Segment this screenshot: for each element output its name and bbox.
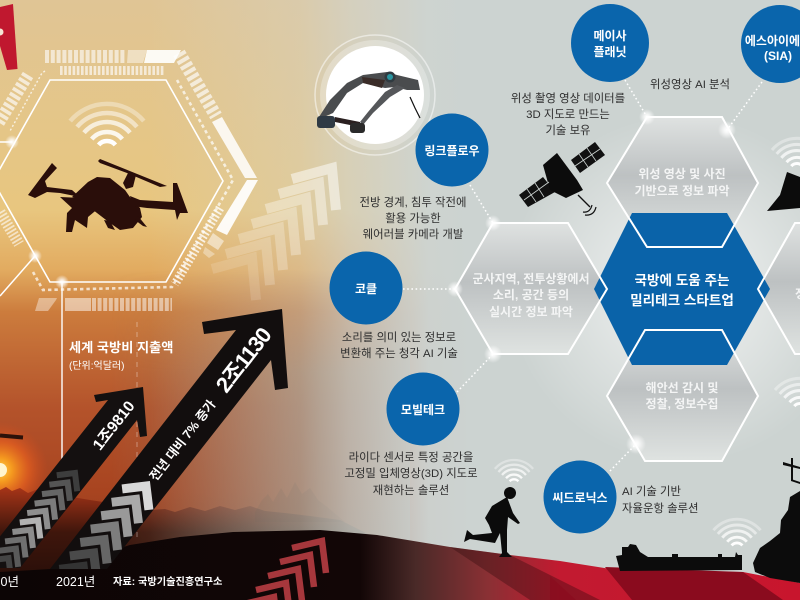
description: Seadronix: AI 기술 기반 [622,485,682,498]
description: SIA: 위성영상 AI 분석 [650,78,730,91]
icon: satellite [519,142,605,215]
helicopter silhouette fragment [0,436,23,438]
hexagon label: coast [646,381,718,411]
icon: wifi right [775,378,800,406]
icon: wifi above drone [70,104,144,145]
company: Meissa Planet: 플래닛 [593,44,627,59]
connector dots [403,80,762,471]
panel: hexagon cluster [455,117,800,461]
hexagon label: center: 밀리테크 스타트업 [630,293,734,308]
description: Meissa Planet: 기술 보유 [545,124,591,137]
small arrow: 2020 spending [0,387,147,576]
description: Mobiltech: 재현하는 솔루션 [373,483,449,497]
hexagon label: center [630,273,734,308]
description: Seadronix [622,485,699,515]
connector glow nodes [447,109,736,454]
icon: tanker ship [616,544,742,571]
big arrow: 2021 spending [50,309,288,590]
description: Meissa Planet: 위성 촬영 영상 데이터를 [511,92,625,105]
ground [0,530,800,600]
hexagon label: satellite: 위성 영상 및 사진 [638,167,726,181]
value: 2020: 1조9810 [90,398,139,454]
axis labels and source: 자료: 국방기술진흥연구소 [113,575,222,588]
center hexagon [594,213,770,365]
company: Cochl: 코클 [355,282,377,296]
description: Mobiltech [344,451,478,497]
hexagon label: military sound: 소리, 공간 등의 [493,288,569,302]
company: SIA: (SIA) [764,49,792,63]
description: Cochl [340,331,458,360]
description: Linkflow [360,195,466,241]
panel: drone hexagon frame [0,50,258,540]
company: Seadronix: 씨드로닉스 [552,491,608,505]
hexagon label: military sound: 군사지역, 전투상황에서 [472,272,590,286]
company: Meissa Planet [571,4,649,82]
red tag top-left [0,4,18,70]
company: SIA [741,5,800,83]
hexagon label: center: 국방에 도움 주는 [634,273,730,288]
hexagon label: military sound [472,272,590,319]
icon: drone [28,159,188,232]
icon: wearable camera [315,35,435,155]
ground dark red facets [450,547,783,600]
axis labels and source [1,575,222,589]
faint distant trees [255,482,345,522]
company: Mobiltech: 모빌테크 [401,403,445,417]
description: Linkflow: 활용 가능한 [385,211,441,225]
description: Meissa Planet [511,92,625,137]
chart title: (단위:억달러) [69,359,124,372]
axis labels and source: 2021년 [56,575,95,589]
icon: wifi at jet [772,138,800,166]
big faded chevrons [212,168,336,300]
description: Cochl: 변환해 주는 청각 AI 기술 [340,347,458,360]
hexagon label: satellite: 기반으로 정보 파악 [634,183,730,198]
company: Linkflow [416,114,488,186]
company: Meissa Planet: 메이사 [593,28,627,43]
description: Linkflow: 전방 경계, 침투 작전에 [360,195,466,209]
description: Mobiltech: 고정밀 입체영상(3D) 지도로 [344,467,478,480]
icon: stealth jet [767,172,800,211]
chart title: 세계 국방비 지출액 [69,340,173,355]
hexagon label: satellite [634,167,730,198]
description: Cochl: 소리를 의미 있는 정보로 [342,331,456,344]
axis labels and source: 0년 [1,575,19,589]
company: Linkflow: 링크플로우 [424,144,480,158]
icon: warship [753,458,800,583]
hexagon label: coast: 해안선 감시 및 [646,381,718,395]
hexagon label: coast: 정찰, 정보수집 [646,397,718,411]
lower-right desaturation of the sunset [136,301,398,544]
description: Meissa Planet: 3D 지도로 만드는 [526,108,610,121]
icon: soldier [464,487,520,557]
treeline [0,487,370,600]
icon: wifi at soldier [495,460,533,481]
description: Linkflow: 웨어러블 카메라 개발 [363,228,464,241]
hexagon label: military sound: 실시간 정보 파악 [489,305,573,319]
company: Seadronix [544,460,616,534]
icon: wifi at tanker [713,519,761,545]
chart title [69,340,173,372]
description: Seadronix: 자율운항 솔루션 [622,502,699,515]
red chevrons on ground [244,541,326,600]
description: Mobiltech: 라이다 센서로 특정 공간을 [349,451,473,464]
note: year over year: 전년 대비 7% 증가 [147,397,219,484]
setting sun [0,422,48,518]
value: 2021: 2조1130 [211,323,277,397]
soft glow behind hexagons [507,114,800,464]
company: Mobiltech [386,372,460,446]
company: Cochl [330,252,402,324]
